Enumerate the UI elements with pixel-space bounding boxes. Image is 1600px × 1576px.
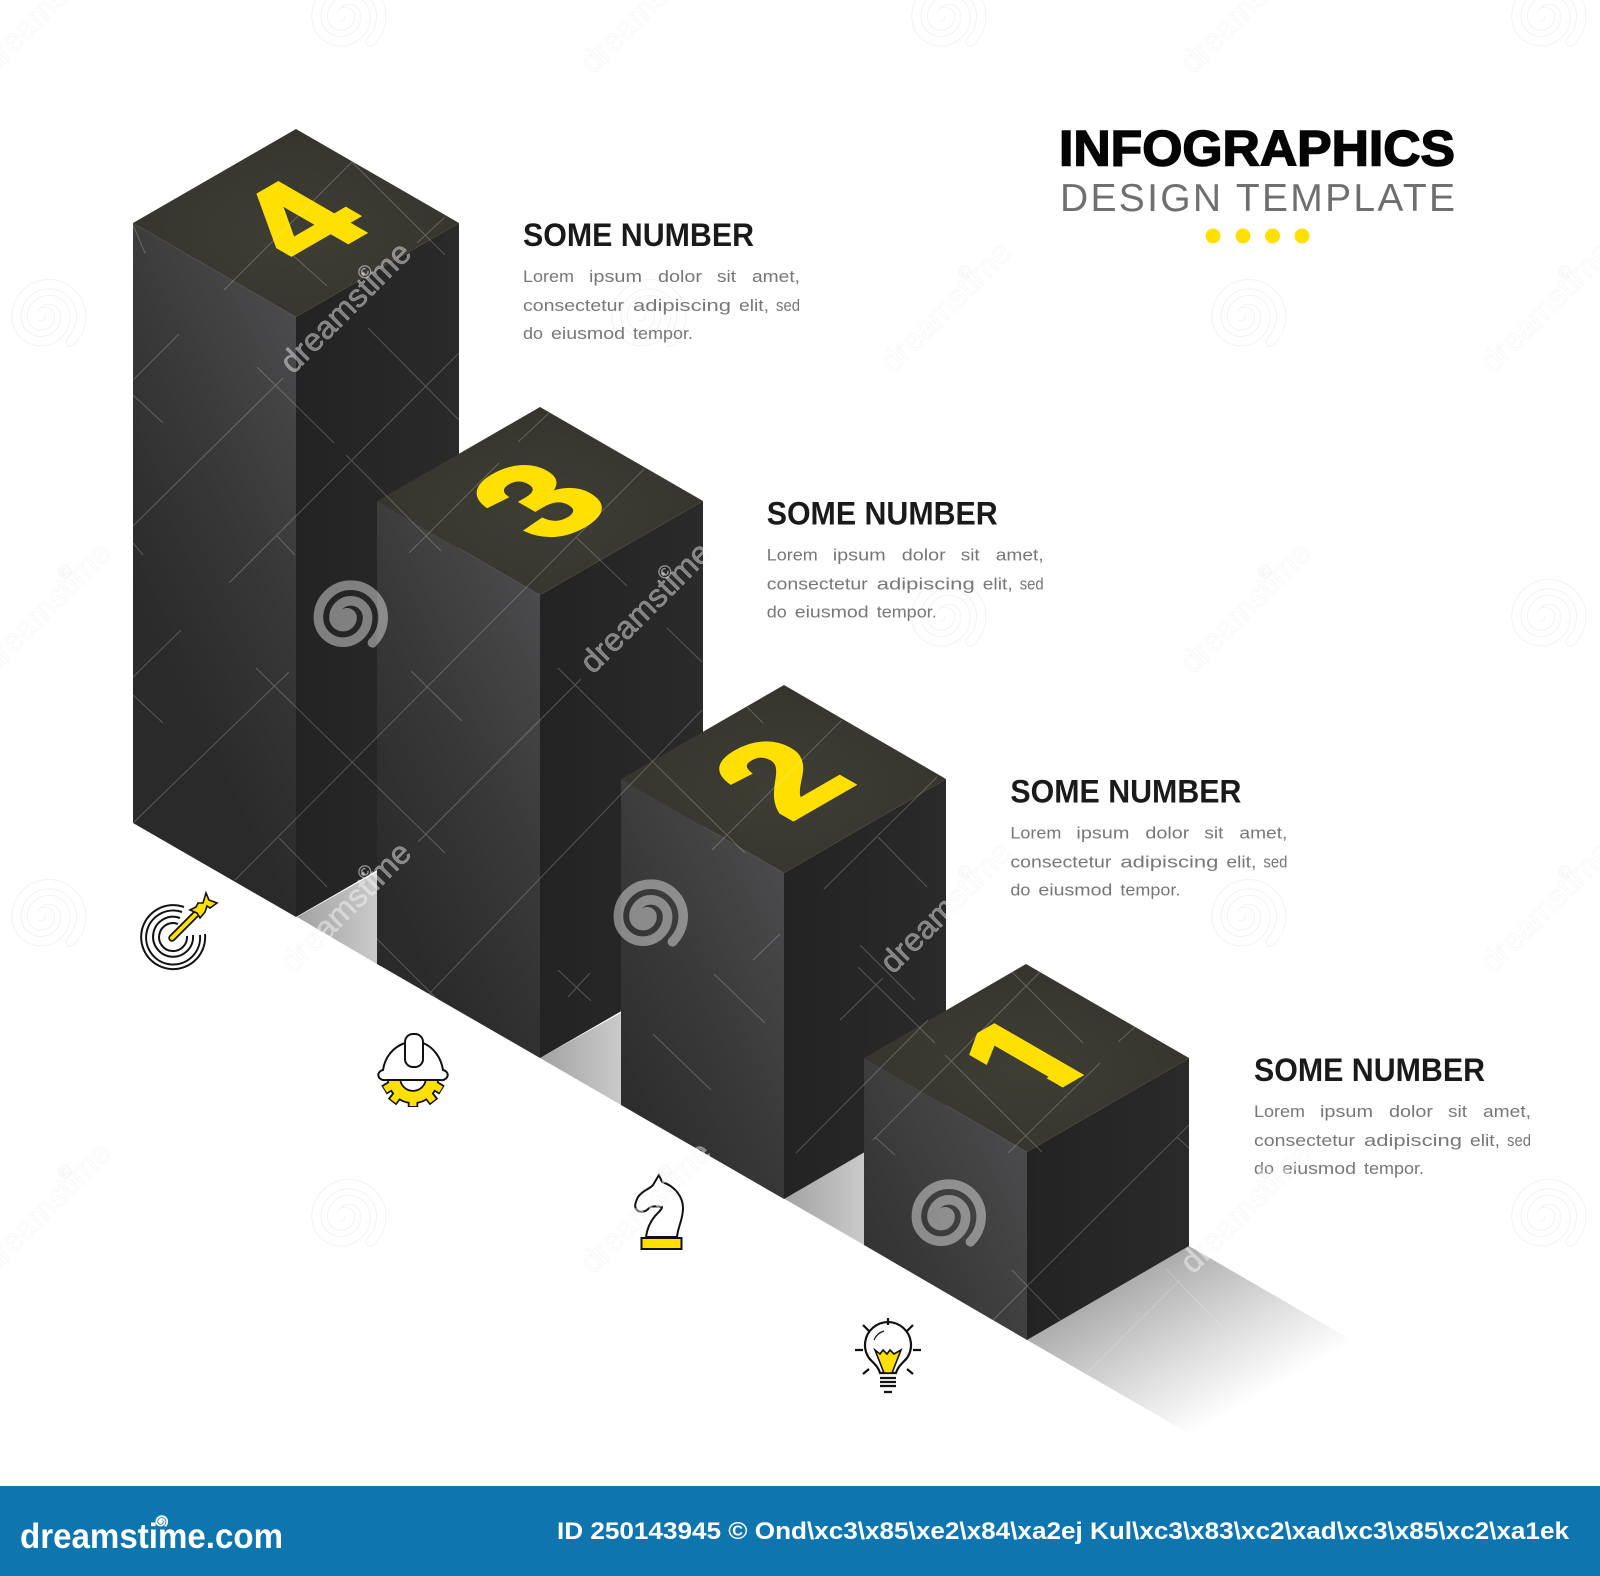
watermark text: © (1253, 1160, 1277, 1184)
text block 3: sit (961, 545, 980, 564)
block 2 (621, 685, 946, 1199)
text block 2: eiusmod (1038, 881, 1112, 900)
text block 2 (1010, 774, 1287, 900)
watermark text: © (953, 860, 977, 884)
text block 2: consectetur (1010, 853, 1112, 872)
text block 2: elit, (1226, 853, 1256, 872)
watermark text: © (53, 560, 77, 584)
block 3 (377, 407, 703, 1058)
text block 3 (767, 495, 1044, 621)
block 1 (864, 964, 1189, 1340)
text block 4: tempor. (633, 324, 693, 343)
text block 2: dolor (1145, 824, 1190, 843)
number 2: 2 (676, 716, 886, 838)
text block 1: dolor (1389, 1102, 1433, 1121)
watermark hairlines (133, 162, 1223, 1373)
text block 3: elit, (983, 574, 1013, 593)
text block 2: do (1010, 881, 1030, 900)
text block 1: SOME NUMBER (1254, 1052, 1485, 1088)
watermark text: © (653, 1160, 677, 1184)
text block 4: SOME NUMBER (523, 217, 754, 253)
text block 3: tempor. (877, 602, 937, 621)
text block 4: elit, (739, 296, 769, 315)
footer logo: dreamstime.com (20, 1517, 283, 1556)
four yellow dots (1206, 228, 1310, 244)
text block 3: eiusmod (795, 602, 869, 621)
footer credit: ID 250143945 © Ond\xc3\x85\xe2\x84\xa2ej Kul\xc3\x83\xc2\xad\xc3\x85\xc2\xa1ek (557, 1518, 1569, 1545)
text block 1: consectetur (1254, 1131, 1355, 1150)
watermark text: © (353, 860, 377, 884)
text block 3: consectetur (767, 574, 868, 593)
text block 4: consectetur (523, 296, 624, 315)
text block 2: sit (1204, 824, 1224, 843)
text block 1: amet, (1483, 1102, 1531, 1121)
text block 3: dolor (902, 545, 946, 564)
text block 4: dolor (658, 267, 702, 286)
text block 1: elit, (1470, 1131, 1500, 1150)
text block 4: do (523, 324, 543, 343)
text block 1: sit (1448, 1102, 1467, 1121)
text block 3: sed (1020, 574, 1044, 593)
watermark text: dreamstime (572, 534, 718, 680)
icon: light bulb (855, 1318, 921, 1392)
icon: target with arrow (141, 893, 217, 969)
text block 4: adipiscing (633, 296, 731, 315)
text block 3: ipsum (833, 545, 886, 564)
text block 2: ipsum (1076, 824, 1129, 843)
text block 4: eiusmod (551, 324, 625, 343)
text block 4: Lorem (523, 267, 574, 286)
block 4 (133, 129, 459, 917)
text block 1: sed (1507, 1131, 1531, 1150)
watermark text: © (353, 260, 377, 284)
text block 2: amet, (1239, 824, 1287, 843)
text block 2: adipiscing (1120, 853, 1218, 872)
text block 1: ipsum (1320, 1102, 1373, 1121)
faint watermark spirals (16, 0, 1581, 1242)
text block 4: sed (776, 296, 800, 315)
watermark text: dreamstime (1172, 534, 1318, 680)
text block 3: Lorem (767, 545, 818, 564)
watermark text: dreamstime (872, 234, 1018, 380)
watermark text: dreamstime (1172, 1134, 1318, 1280)
text block 2: sed (1263, 853, 1287, 872)
text block 4: ipsum (589, 267, 642, 286)
watermark text: © (1553, 260, 1577, 284)
watermark text: © (653, 560, 677, 584)
text block 4: sit (717, 267, 736, 286)
strong watermark spirals (318, 585, 981, 1242)
watermark text: dreamstime (272, 834, 418, 980)
watermark text: © (953, 260, 977, 284)
text block 1 (1254, 1052, 1531, 1178)
text block 3: adipiscing (877, 574, 975, 593)
text block 2: Lorem (1010, 824, 1061, 843)
watermark text: dreamstime (872, 834, 1018, 980)
text block 4 (523, 217, 800, 343)
cast shadows (297, 872, 1372, 1440)
watermark text: © (1253, 560, 1277, 584)
text block 1: Lorem (1254, 1102, 1305, 1121)
title line 1: INFOGRAPHICS (1059, 120, 1455, 176)
footer bar (0, 1486, 1600, 1576)
text block 4: amet, (752, 267, 800, 286)
text block 3: SOME NUMBER (767, 495, 998, 531)
number 4: 4 (194, 160, 404, 282)
number 1: 1 (922, 995, 1132, 1117)
text block 1: eiusmod (1282, 1159, 1356, 1178)
icon: helmet with gear (378, 1034, 448, 1107)
text block 3: do (767, 602, 787, 621)
number 3: 3 (434, 440, 644, 561)
text block 1: adipiscing (1364, 1131, 1462, 1150)
text block 1: tempor. (1364, 1159, 1424, 1178)
watermark text: dreamstime (272, 234, 418, 380)
icon: chess knight (635, 1175, 683, 1249)
text block 3: amet, (996, 545, 1044, 564)
title line 2: DESIGN TEMPLATE (1060, 177, 1455, 220)
watermark text: © (53, 1160, 77, 1184)
text block 1: do (1254, 1159, 1274, 1178)
text block 2: tempor. (1120, 881, 1180, 900)
watermark text: © (1553, 860, 1577, 884)
watermark text: dreamstime (572, 1134, 718, 1280)
title (1059, 120, 1455, 244)
text block 2: SOME NUMBER (1010, 774, 1241, 810)
